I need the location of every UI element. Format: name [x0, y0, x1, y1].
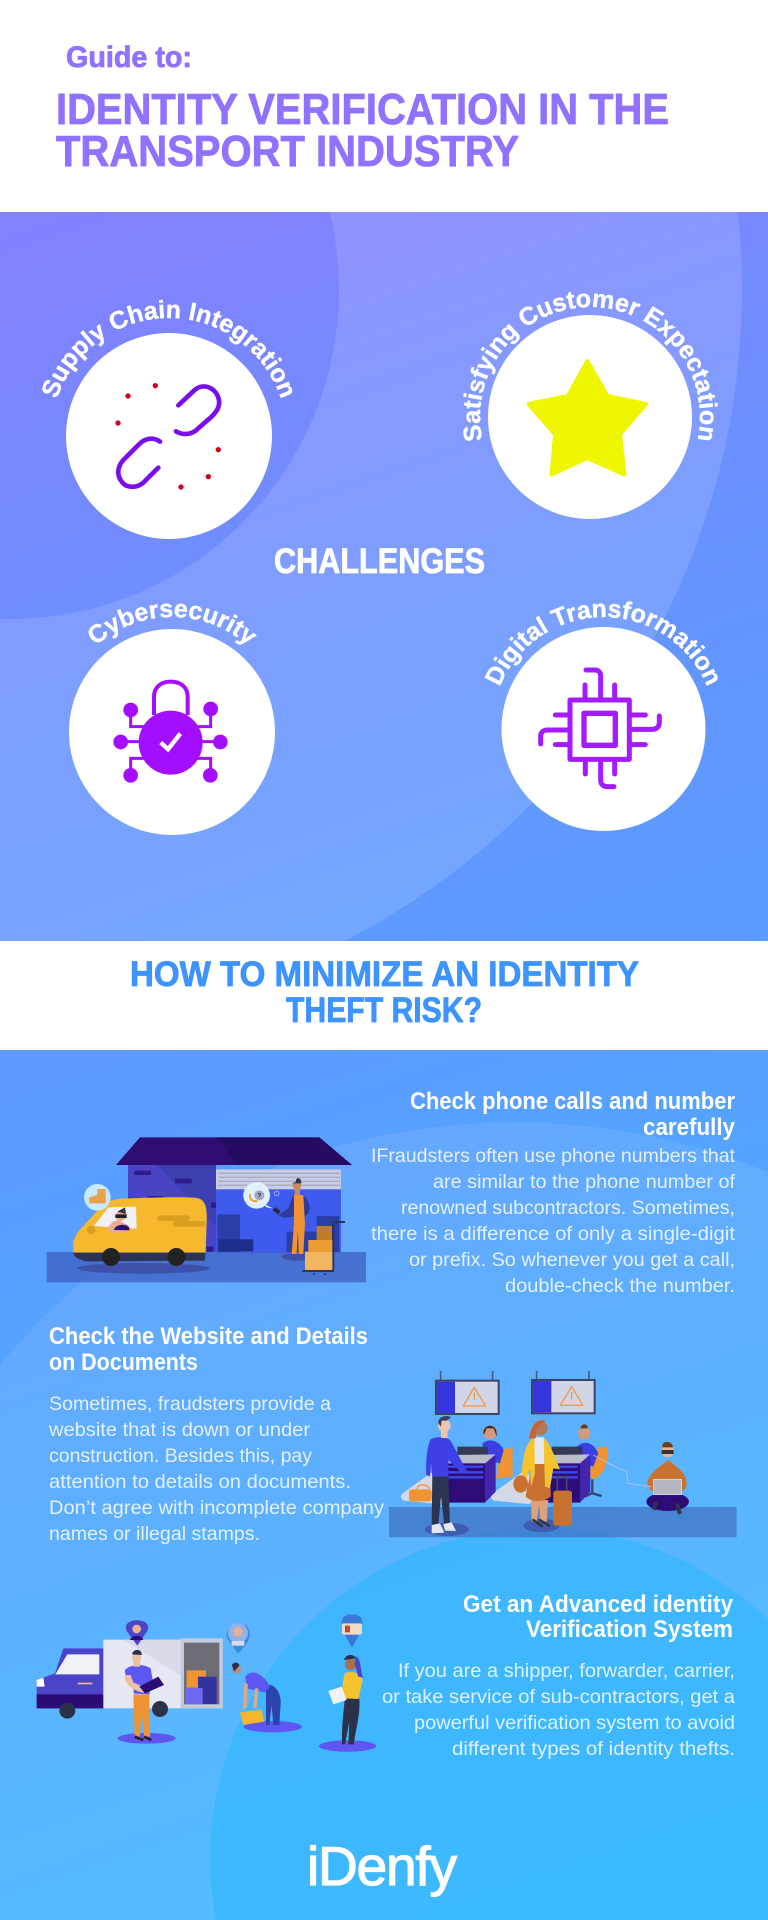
header band: TRANSPORT INDUSTRY	[56, 127, 519, 176]
illustration: airport check-in	[389, 1371, 737, 1537]
tip 2 text: check the website: Don’t agree with incomplete company	[49, 1498, 385, 1519]
tip 2 text: check the website: website that is down or under	[48, 1420, 311, 1441]
tip 1 text: check phone calls: IFraudsters often use phone numbers that	[371, 1146, 736, 1167]
tip 3 text: advanced verification: Verification System	[526, 1616, 733, 1643]
tip 3 text: advanced verification: If you are a shipper, forwarder, carrier,	[398, 1661, 735, 1682]
tip 3 text: advanced verification: or take service of sub-contractors, get a	[382, 1687, 735, 1708]
tip 1 text: check phone calls: renowned subcontractors. Sometimes,	[401, 1198, 735, 1219]
header band: IDENTITY VERIFICATION IN THE	[56, 85, 669, 134]
challenge: satisfying customer expectation	[463, 292, 718, 519]
tip 1 text: check phone calls: are similar to the phone number of	[433, 1172, 736, 1193]
tip 2 text: check the website	[48, 1323, 385, 1545]
logo: iDenfy: iDenfy	[307, 1835, 458, 1897]
tip 1 text: check phone calls: there is a difference of only a single-digit	[371, 1224, 736, 1245]
tip 1 text: check phone calls: double-check the number.	[505, 1276, 735, 1297]
challenge: supply chain integration	[42, 300, 292, 539]
tip 3 text: advanced verification: powerful verification system to avoid	[414, 1713, 735, 1734]
tip 2 text: check the website: Check the Website and Details	[49, 1323, 368, 1350]
illustration: warehouse and van: ?	[257, 1193, 261, 1200]
challenge: cybersecurity	[69, 604, 275, 835]
tip 2 text: check the website: attention to details on documents.	[49, 1472, 351, 1493]
band: how to minimize heading	[0, 941, 768, 1050]
challenge: digital transformation: Digital Transformation	[484, 601, 718, 686]
header band: Guide to:	[66, 41, 192, 74]
panel background shapes: tips	[0, 1122, 768, 1920]
tip 2 text: check the website: Sometimes, fraudsters provide a	[49, 1394, 331, 1415]
tip 1 text: check phone calls: Check phone calls and number	[410, 1088, 735, 1115]
tip 1 text: check phone calls	[371, 1088, 736, 1297]
challenge: cybersecurity: Cybersecurity	[88, 604, 257, 645]
tip 3 text: advanced verification: Get an Advanced identity	[463, 1591, 734, 1618]
header band	[0, 0, 768, 212]
tip 1 text: check phone calls: or prefix. So whenever you get a call,	[409, 1250, 735, 1271]
illustration: delivery truck and workers	[37, 1614, 376, 1752]
band: how to minimize heading: THEFT RISK?	[286, 991, 482, 1030]
tip 3 text: advanced verification: different types of identity thefts.	[452, 1739, 735, 1760]
challenge: supply chain integration: Supply Chain Integration	[42, 300, 292, 398]
tip 2 text: check the website: on Documents	[49, 1349, 198, 1376]
band: how to minimize heading: HOW TO MINIMIZE AN IDENTITY	[130, 955, 639, 994]
tip 2 text: check the website: construction. Besides this, pay	[49, 1446, 313, 1467]
tip 1 text: check phone calls: carefully	[643, 1114, 736, 1141]
challenge: satisfying customer expectation: Satisfying Customer Expectation	[463, 292, 718, 441]
panel: challenges	[0, 212, 742, 941]
section title: challenges: CHALLENGES	[274, 542, 485, 581]
tip 2 text: check the website: names or illegal stamps.	[49, 1524, 260, 1545]
challenge: digital transformation	[484, 601, 718, 831]
illustration: warehouse and van	[47, 1137, 366, 1282]
tip 3 text: advanced verification	[382, 1591, 735, 1760]
